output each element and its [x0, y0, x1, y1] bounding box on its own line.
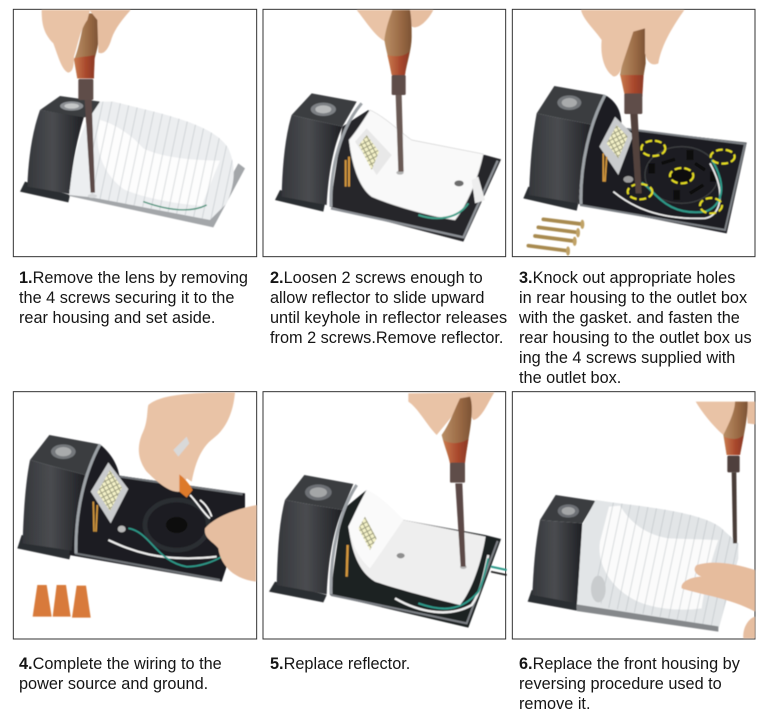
- panel: step 1 remove lens: [13, 9, 257, 257]
- panel: step 4 complete wiring: [13, 392, 257, 639]
- panel: step 2 loosen screws: [263, 9, 506, 257]
- text: step 3: 3.Knock out appropriate holes: [519, 269, 735, 287]
- text: step 6: remove it.: [519, 695, 590, 713]
- text: step 4: [19, 655, 222, 693]
- text: step 1: [19, 269, 248, 327]
- text: step 3: the outlet box.: [519, 369, 621, 387]
- text: step 2: 2.Loosen 2 screws enough to: [270, 269, 483, 287]
- text: step 1: the 4 screws securing it to the: [19, 289, 234, 307]
- text: step 3: rear housing to the outlet box us: [519, 329, 752, 347]
- text: step 3: with the gasket. and fasten the: [519, 309, 740, 327]
- panel: step 3 knock out holes: [512, 9, 755, 257]
- panel: step 5 replace reflector: [263, 392, 507, 639]
- text: step 6: [519, 655, 740, 713]
- text: step 1: 1.Remove the lens by removing: [19, 269, 248, 287]
- text: step 3: [519, 269, 752, 387]
- text: step 2: allow reflector to slide upward: [270, 289, 484, 307]
- text: step 6: 6.Replace the front housing by: [519, 655, 740, 673]
- text: step 4: power source and ground.: [19, 675, 208, 693]
- text: step 5: 5.Replace reflector.: [270, 655, 410, 673]
- text: step 2: from 2 screws.Remove reflector.: [270, 329, 503, 347]
- text: step 3: ing the 4 screws supplied with: [519, 349, 735, 367]
- text: step 1: rear housing and set aside.: [19, 309, 215, 327]
- text: step 4: 4.Complete the wiring to the: [19, 655, 222, 673]
- text: step 6: reversing procedure used to: [519, 675, 722, 693]
- panel: step 6 replace front housing: [512, 392, 755, 639]
- text: step 2: [270, 269, 507, 347]
- text: step 2: until keyhole in reflector releases: [270, 309, 507, 327]
- text: step 3: in rear housing to the outlet box: [519, 289, 747, 307]
